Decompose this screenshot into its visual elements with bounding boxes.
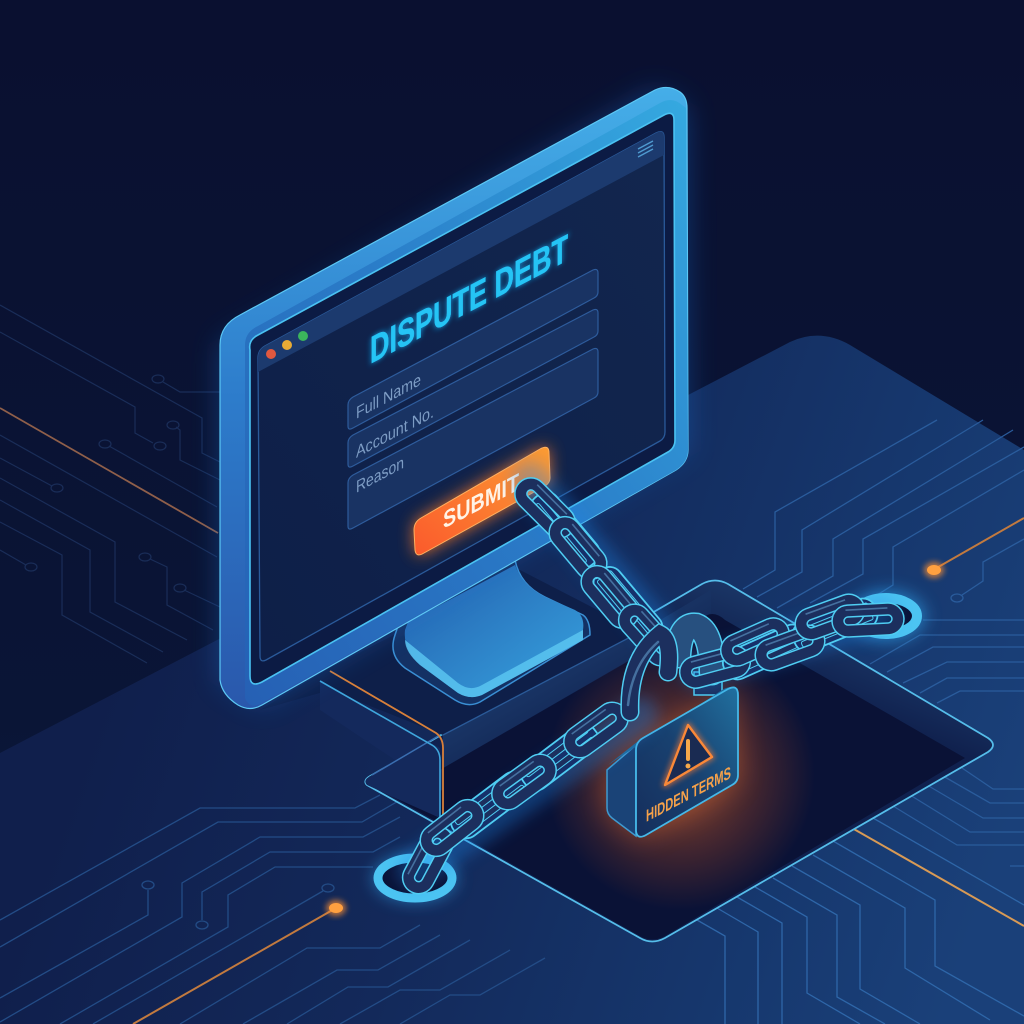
field: reason	[348, 348, 598, 529]
monitor	[220, 87, 688, 708]
form heading	[370, 225, 568, 372]
chain: padlock shackle	[628, 626, 712, 712]
orange trace: upper left	[0, 408, 218, 533]
orange trace: lower right	[852, 828, 1024, 926]
browser title bar	[258, 132, 664, 372]
chain: submit to padlock	[517, 479, 676, 664]
lock shackle post	[694, 672, 722, 695]
desk panel	[0, 336, 1024, 1024]
frame: front bezel	[245, 100, 688, 706]
form heading: DISPUTE DEBT	[370, 225, 568, 372]
chain: lower left ring to padlock	[404, 703, 626, 891]
warning triangle icon	[665, 725, 712, 785]
pit in the desk	[365, 580, 993, 942]
field: account number	[348, 309, 598, 467]
bezel inner	[250, 113, 675, 684]
field: full name	[348, 269, 598, 429]
submit button: SUBMIT	[443, 469, 519, 535]
form heading: DISPUTE DEBT	[370, 225, 568, 372]
submit button	[414, 447, 550, 555]
anchor ring: upper right	[850, 590, 926, 642]
chain: padlock to upper right ring	[683, 595, 898, 684]
chain glow	[415, 480, 880, 870]
circuit traces: upper left background	[0, 305, 220, 663]
lock body side	[607, 745, 636, 836]
circuit traces: lower left desk	[0, 795, 545, 1024]
lock glow	[607, 686, 738, 838]
orange trace: right with node	[924, 518, 1024, 578]
field: full name: Full Name	[356, 370, 421, 423]
screen	[258, 132, 665, 661]
frame: monitor casing	[220, 87, 688, 708]
padlock	[607, 672, 738, 838]
lock top	[608, 687, 737, 765]
menu icon	[638, 141, 653, 157]
field: account number: Account No.	[356, 402, 434, 462]
circuit traces: right desk	[743, 420, 1024, 866]
lock front	[636, 687, 738, 837]
label: hidden terms: HIDDEN TERMS	[646, 763, 731, 826]
anchor ring: lower left	[373, 854, 457, 902]
glow: monitor	[220, 90, 688, 705]
orange trace: lower left with node	[133, 900, 346, 1024]
field: reason: Reason	[356, 453, 404, 497]
window control dots	[266, 331, 308, 359]
monitor plinth	[260, 570, 711, 828]
circuit traces: lower right desk	[697, 818, 1024, 1024]
monitor stand	[393, 560, 590, 705]
